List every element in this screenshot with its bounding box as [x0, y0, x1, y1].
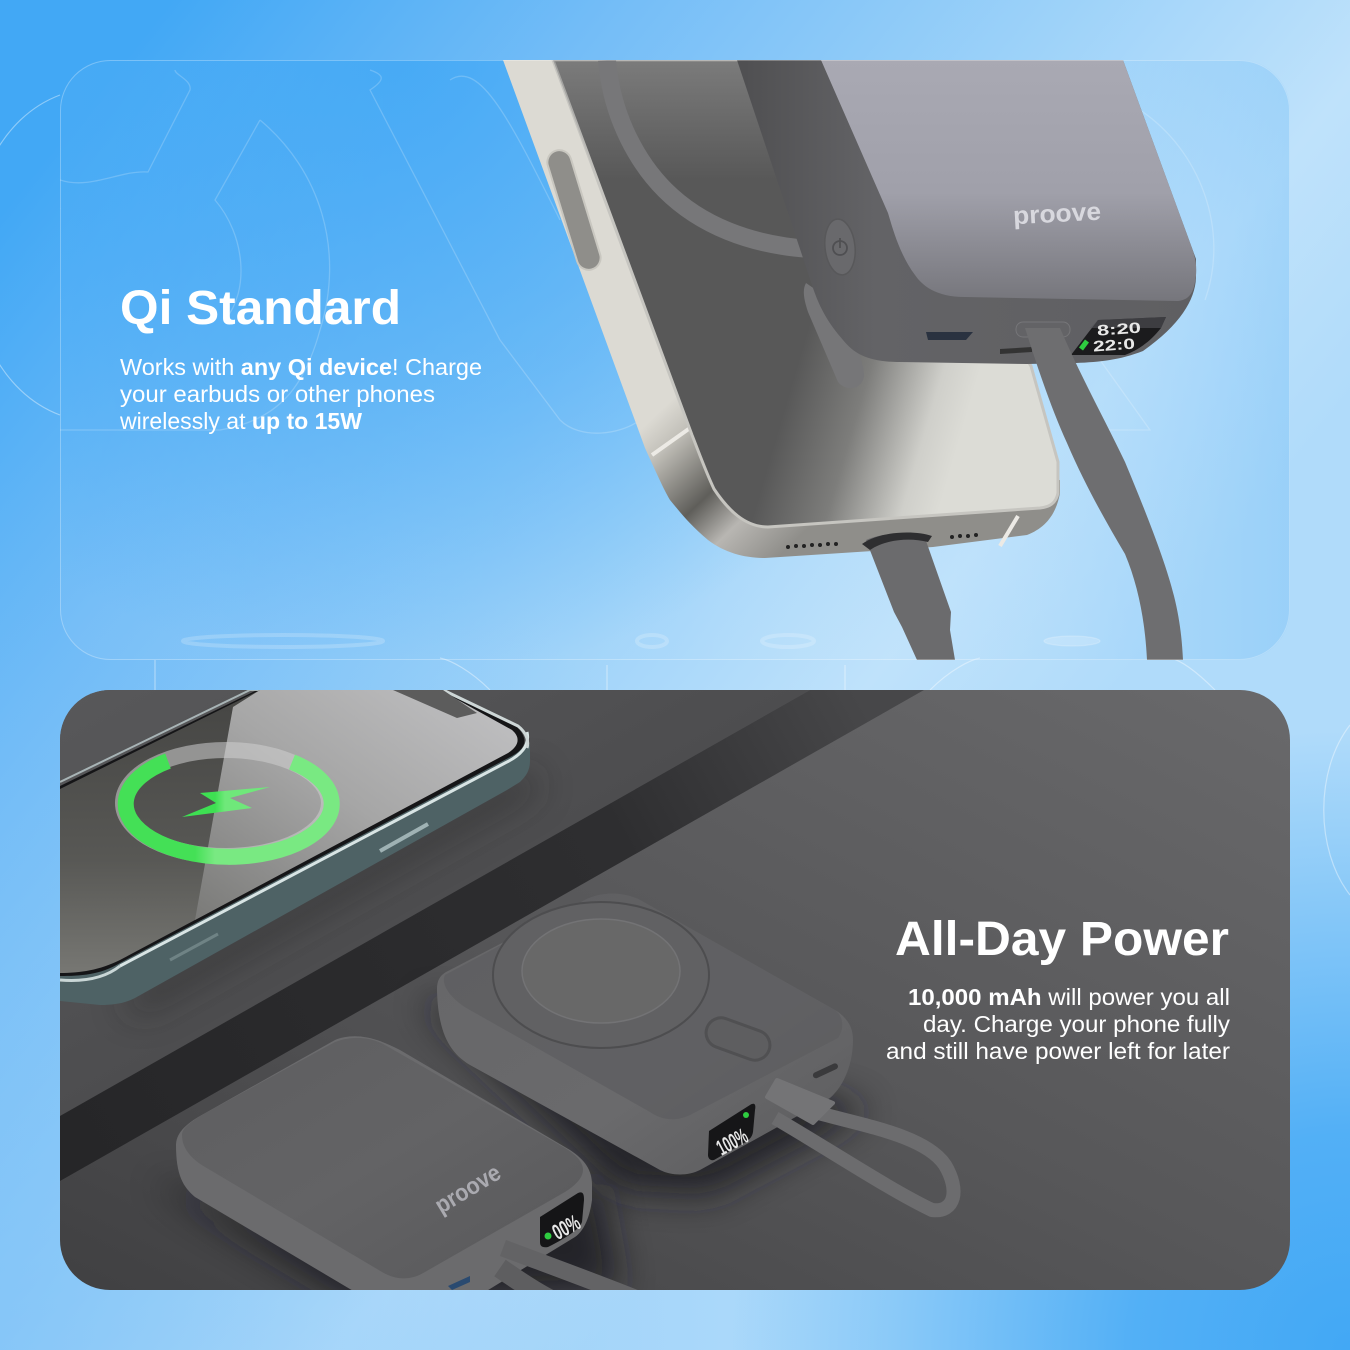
USB-C port: [813, 1064, 838, 1078]
lightning bolt: [182, 787, 270, 817]
digital display: 22:0: [1092, 336, 1136, 356]
panel: Qi Standard: [39, 60, 1290, 660]
heading: All-Day Power: [895, 913, 1229, 966]
power bank: [737, 60, 1196, 364]
camera notch: [393, 690, 477, 718]
cable socket: [1016, 322, 1070, 337]
phone with wireless charging screen: [60, 690, 540, 1015]
power bank with magnetic ring: [420, 894, 954, 1210]
top face: [182, 1038, 583, 1278]
panel: All-Day Power: [60, 690, 1290, 1302]
stand button: [704, 1016, 772, 1062]
display 100%: [708, 1104, 755, 1160]
power bank top face: [821, 60, 1196, 301]
side button: [544, 147, 604, 273]
desk step edge: [60, 690, 924, 1181]
body: [176, 1036, 592, 1295]
phone frame rim: [60, 690, 524, 976]
logo: proove: proove: [430, 1159, 506, 1219]
heading: Qi Standard: [120, 282, 401, 335]
display: 00%: [548, 1210, 584, 1245]
body text: and still have power left for later: [886, 1038, 1230, 1064]
power button icon: [826, 220, 856, 274]
cables: [503, 1248, 640, 1300]
top face shade: [450, 902, 818, 1116]
phone cable: [862, 532, 955, 660]
phone back panel: [553, 60, 1058, 527]
bank cable: [1025, 328, 1183, 660]
speaker grilles and port: [786, 533, 978, 549]
desk upper surface: [60, 690, 810, 914]
magsafe ring on phone: [607, 60, 810, 249]
body text: 10,000 mAh will power you all: [908, 984, 1230, 1010]
body text: your earbuds or other phones: [120, 381, 435, 407]
body text: [119, 354, 482, 434]
logo: proove: proove: [1012, 198, 1102, 230]
phone: [503, 60, 1060, 558]
phone side: [60, 745, 530, 1005]
body text: Works with any Qi device! Charge: [120, 354, 482, 380]
charging ring: [123, 750, 332, 857]
display 100%: 100%: [712, 1123, 752, 1160]
phone shadow: [120, 770, 540, 1015]
decorative outline pattern: [39, 70, 1214, 647]
magnetic ring: [493, 902, 709, 1048]
usb port: [448, 1276, 470, 1290]
body text: wirelessly at up to 15W: [119, 408, 362, 434]
body text: day. Charge your phone fully: [923, 1011, 1231, 1037]
light reflection on glass: [195, 690, 518, 920]
cable loop: [767, 1080, 954, 1210]
power bank body: [737, 60, 1196, 364]
power bank stand plate: [804, 283, 852, 384]
usb port: [926, 332, 973, 340]
digital display: 8:20: [1096, 320, 1142, 340]
body text: [886, 984, 1231, 1064]
body: [437, 942, 853, 1174]
display: [540, 1192, 584, 1247]
power bank front: [150, 1036, 640, 1302]
dark glass: [60, 690, 518, 973]
phone metal frame: [503, 60, 1060, 558]
digital display: [1071, 317, 1166, 356]
